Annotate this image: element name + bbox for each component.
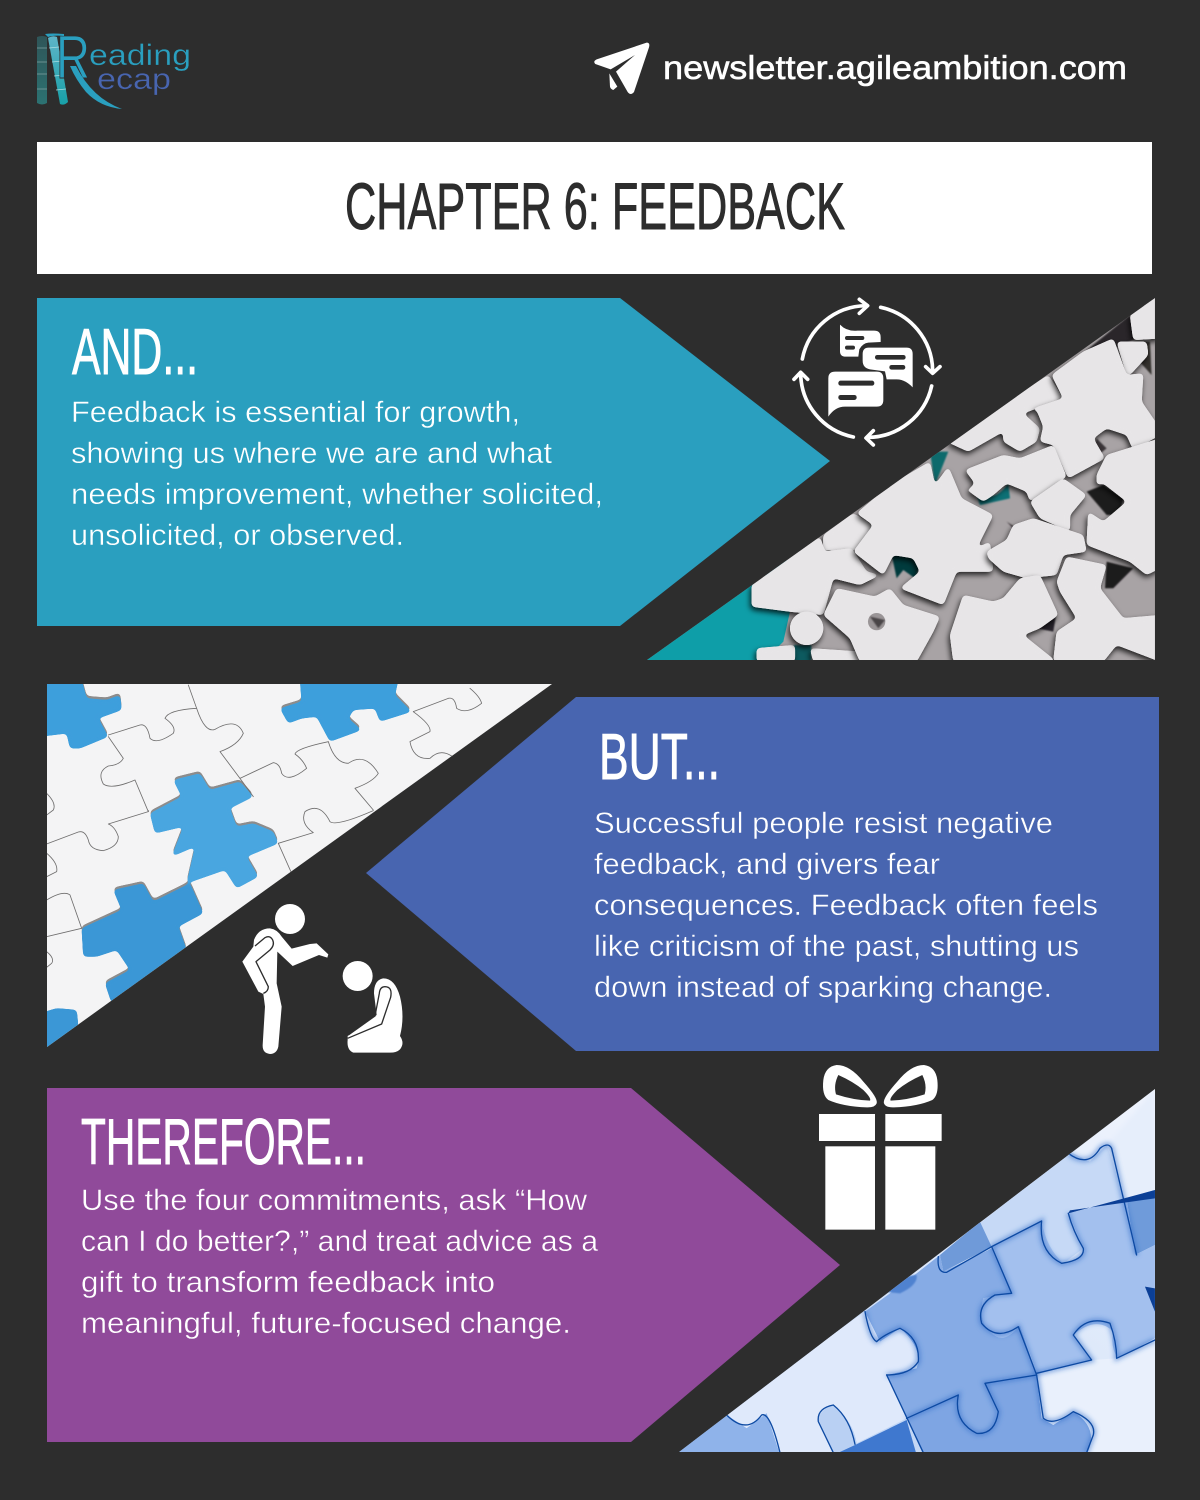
body text: THEREFORE: Use the four commitments, ask “How xyxy=(81,1184,588,1217)
body text: AND: Feedback is essential for growth, xyxy=(71,396,520,429)
panel: THEREFORE xyxy=(47,1088,840,1442)
body text: BUT: Successful people resist negative xyxy=(594,807,1053,840)
panel: BUT xyxy=(366,697,1159,1051)
title: CHAPTER 6: FEEDBACK xyxy=(345,169,845,243)
logo letter R: R xyxy=(56,23,90,91)
heading: THEREFORE: THEREFORE... xyxy=(81,1105,366,1178)
body text: AND xyxy=(71,396,603,552)
puzzle piece shapes xyxy=(752,295,1160,662)
title banner xyxy=(37,142,1152,274)
body text: BUT: down instead of sparking change. xyxy=(594,971,1052,1004)
body text: THEREFORE: meaningful, future-focused change. xyxy=(81,1307,571,1340)
logo swash xyxy=(45,34,122,109)
panel: AND xyxy=(37,298,830,626)
body text: AND: showing us where we are and what xyxy=(71,437,552,470)
icon: gift box xyxy=(819,1065,942,1230)
body text: THEREFORE: can I do better?,” and treat advice as a xyxy=(81,1225,599,1258)
body text: BUT: consequences. Feedback often feels xyxy=(594,889,1098,922)
logo word: eading: eading xyxy=(89,39,191,72)
body text: BUT: like criticism of the past, shutting us xyxy=(594,930,1079,963)
website url: newsletter.agileambition.com xyxy=(663,49,1127,86)
body text: AND: needs improvement, whether solicited, xyxy=(71,478,603,511)
icon: book spines xyxy=(37,36,68,105)
icon: feedback chat cycle xyxy=(794,299,940,445)
body text: BUT xyxy=(594,807,1098,1004)
image: blue embossed puzzle xyxy=(670,1085,1160,1455)
image: scattered grey puzzle pieces xyxy=(640,295,1160,665)
body text: THEREFORE: gift to transform feedback into xyxy=(81,1266,495,1299)
logo: Reading Recap xyxy=(37,23,191,109)
body text: BUT: feedback, and givers fear xyxy=(594,848,940,881)
icon: paper plane xyxy=(594,43,649,94)
embossed groove glow xyxy=(865,1145,1155,1453)
body text: THEREFORE xyxy=(81,1184,599,1340)
icon: person scolding kneeling person xyxy=(242,904,402,1054)
image: white puzzle with blue gaps xyxy=(40,678,560,1053)
heading: AND: AND... xyxy=(72,315,198,388)
logo word: ecap: ecap xyxy=(97,63,171,96)
body text: AND: unsolicited, or observed. xyxy=(71,519,404,552)
heading: BUT: BUT... xyxy=(599,720,720,793)
